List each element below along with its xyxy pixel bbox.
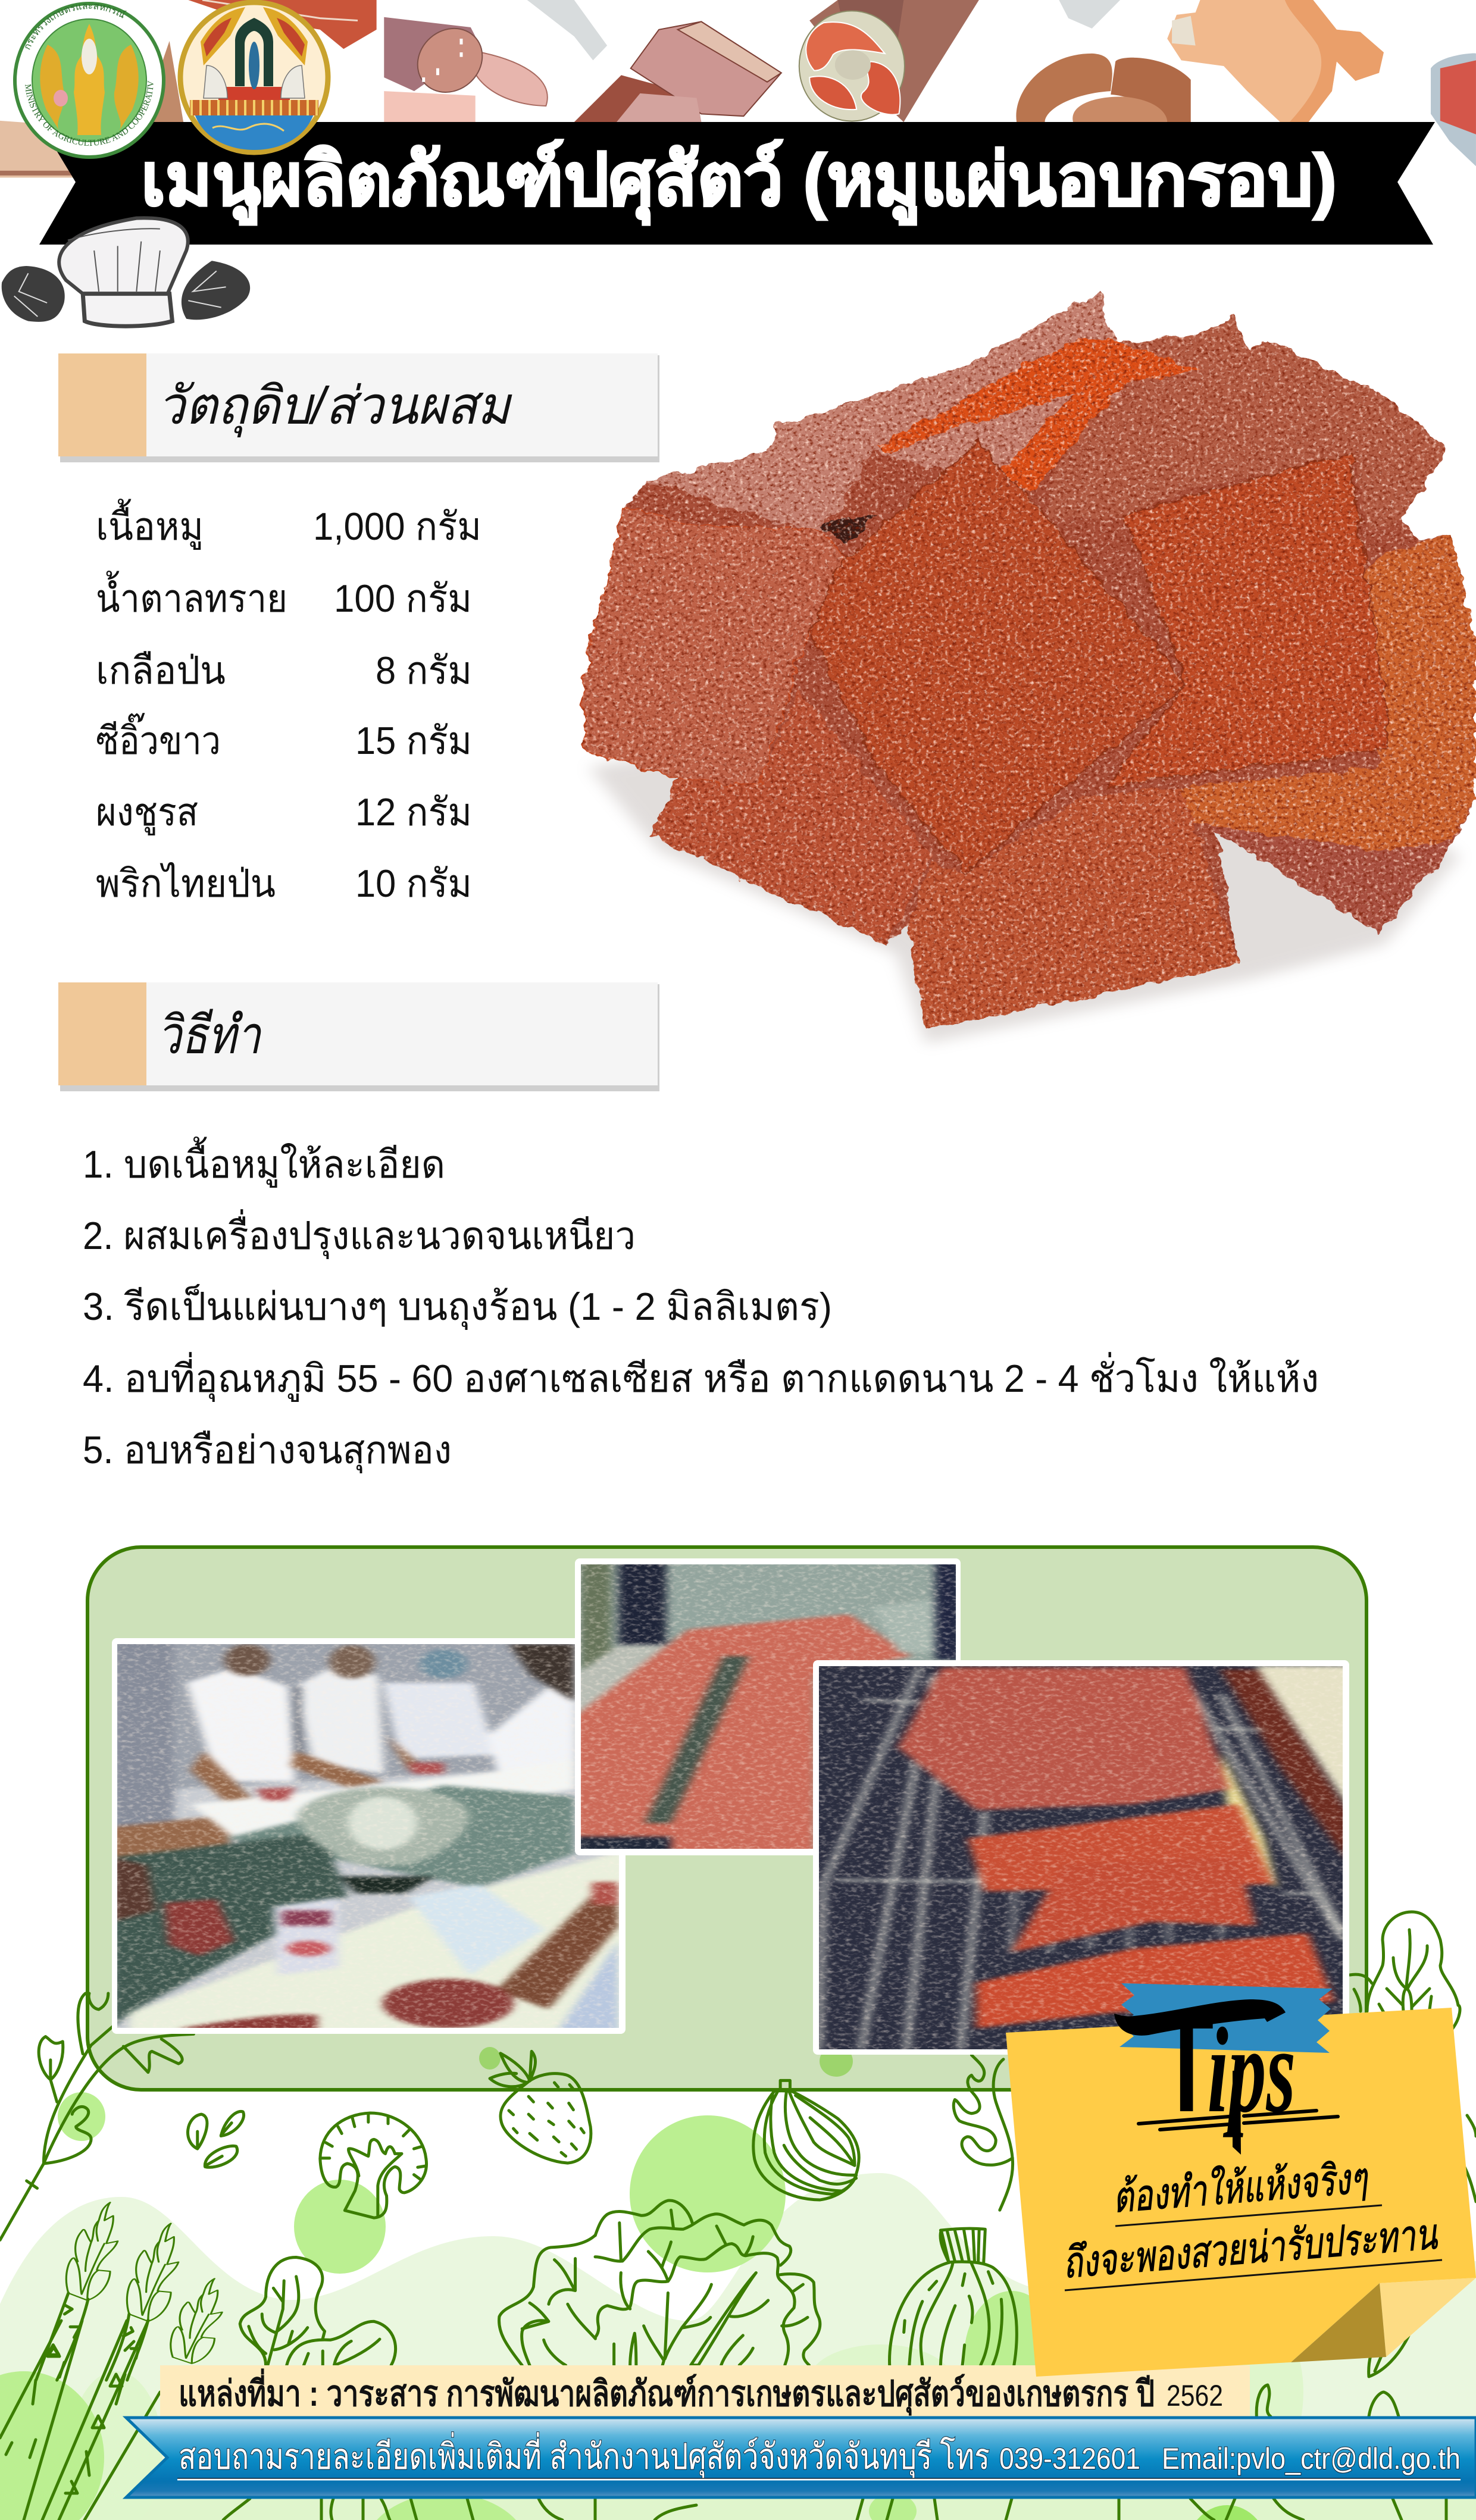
heading: ingredients: วัตถุดิบ/ส่วนผสม: [157, 376, 512, 437]
vegetable line art: lettuce, onion, cucumber, right vine: [595, 2055, 1017, 2365]
ingredients list: เกลือป่น: [96, 649, 226, 692]
vegetable line art: vine, leaves, mushroom, strawberry: [0, 1993, 595, 2380]
tips note: [1006, 1981, 1476, 2377]
title banner: [39, 122, 1435, 245]
vegetable line art: right leaf and vines: [1256, 1912, 1476, 2422]
method steps: 4. อบที่อุณหภูมิ 55 - 60 องศาเซลเซียส หรือ ตากแดดนาน 2 - 4 ชั่วโมง ให้แห้ง: [83, 1352, 1319, 1403]
contact banner: [126, 2418, 1476, 2497]
method steps: 2. ผสมเครื่องปรุงและนวดจนเหนียว: [83, 1209, 636, 1260]
contact banner: สอบถามรายละเอียดเพิ่มเติมที่ สำนักงานปศุสัตว์จังหวัดจันทบุรี โทร: [179, 2432, 990, 2478]
logo: ministry of agriculture and cooperatives: กระทรวงเกษตรและสหกรณ์: [25, 4, 127, 50]
ingredients list: 100 กรัม: [334, 577, 472, 620]
icon: chef hat with steaks: [2, 218, 250, 326]
logo: department of livestock development: [180, 2, 328, 152]
tips text: ต้องทำให้แห้งจริงๆ: [1111, 2153, 1370, 2222]
heading: method: [58, 982, 659, 1091]
method steps: 3. รีดเป็นแผ่นบางๆ บนถุงร้อน (1 - 2 มิลลิเมตร): [83, 1284, 832, 1331]
source strip: 2562: [1167, 2379, 1223, 2412]
ingredients list: 12 กรัม: [355, 790, 472, 834]
tips word: [1114, 1981, 1338, 2155]
title: เมนูผลิตภัณฑ์ปศุสัตว์ (หมูแผ่นอบกรอบ): [141, 139, 1337, 225]
ingredients list: 15 กรัม: [355, 719, 472, 762]
ingredients list: พริกไทยป่น: [96, 862, 276, 905]
tips word: ips: [1208, 2002, 1296, 2137]
asparagus stalks: [0, 2321, 160, 2520]
contact banner: 039-312601: [999, 2442, 1140, 2475]
photo: meat sheets on oven rack: [811, 1660, 1352, 2055]
source strip: [160, 2365, 1250, 2416]
vegetable lines below the banner: [223, 2499, 1446, 2520]
method steps: 1. บดเนื้อหมูให้ละเอียด: [83, 1137, 445, 1188]
ingredients list: เนื้อหมู: [96, 499, 204, 550]
ingredients list: 8 กรัม: [376, 649, 472, 692]
photo: workers mixing meat: [112, 1638, 627, 2034]
photo: meat sheets on trays: [575, 1558, 968, 1855]
heading: method: วิธีทำ: [157, 1006, 262, 1065]
ingredients list: 10 กรัม: [355, 862, 472, 905]
header meat illustrations: [0, 0, 1476, 178]
ingredients list: 1,000 กรัม: [313, 505, 481, 548]
ingredients list: ซีอิ๊วขาว: [96, 713, 221, 762]
heading: ingredients: [58, 353, 659, 462]
method steps: [83, 1137, 1319, 1474]
ingredients list: น้ำตาลทราย: [96, 571, 287, 620]
photo: crispy pork sheets: [583, 291, 1476, 1043]
ingredients list: ผงชูรส: [96, 790, 198, 835]
logo: ministry of agriculture and cooperatives: [13, 2, 165, 159]
source strip: แหล่งที่มา : วาระสาร การพัฒนาผลิตภัณฑ์การเกษตรและปศุสัตว์ของเกษตรกร ปี: [179, 2368, 1155, 2416]
icon: blue tape: [1119, 1983, 1333, 2053]
method steps: 5. อบหรือย่างจนสุกพอง: [83, 1428, 452, 1474]
ingredients list: [96, 499, 481, 905]
logo: ministry of agriculture and cooperatives: MINISTRY OF AGRICULTURE AND COOPERATIVES: [25, 81, 154, 146]
background hills and blobs: [0, 2046, 1476, 2520]
tips word: T: [1159, 1981, 1214, 2142]
panel: process photos background: [87, 1547, 1366, 2090]
